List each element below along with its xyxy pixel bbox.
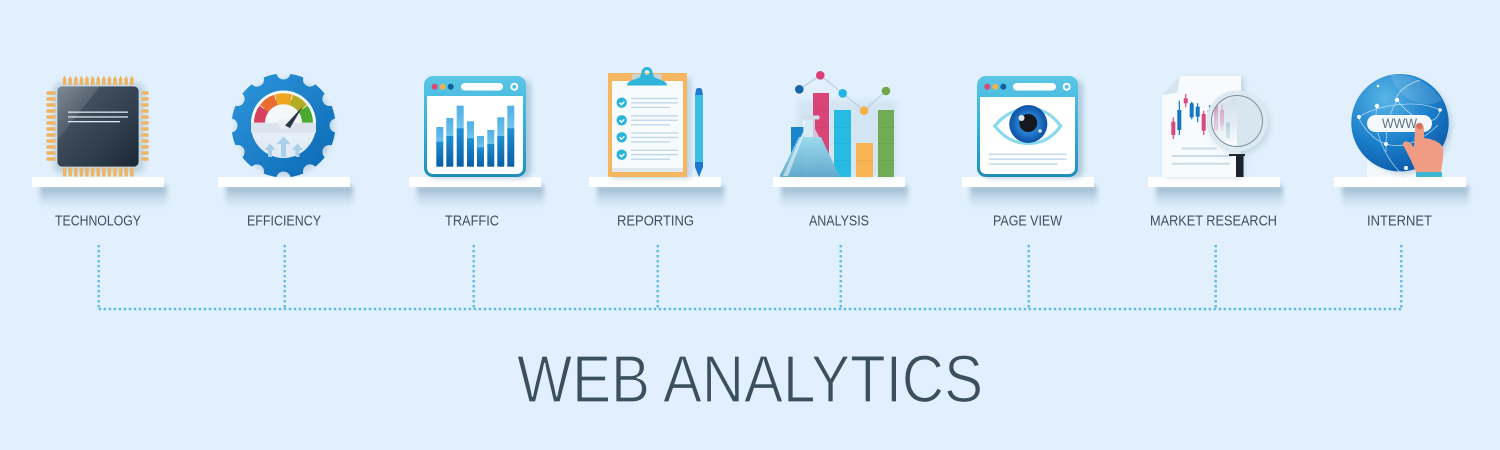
www text: WWW: [1382, 116, 1417, 131]
shelf: [773, 177, 908, 208]
infographic canvas: [32, 67, 1472, 402]
item: internet: [1334, 74, 1469, 230]
item: reporting: [589, 67, 724, 230]
icon: microchip: [51, 78, 148, 173]
item: technology: [32, 78, 167, 230]
item: analysis: [773, 71, 908, 230]
shelf: [218, 177, 353, 208]
title: WEB ANALYTICS: [517, 342, 983, 417]
item: efficiency: [218, 74, 353, 230]
label: TECHNOLOGY: [55, 214, 141, 230]
label: MARKET RESEARCH: [1150, 214, 1277, 230]
icon: browser window with bar chart: [424, 76, 531, 178]
icon: bar chart, line chart and flask: [780, 71, 897, 177]
label: EFFICIENCY: [247, 214, 321, 230]
shelf: [962, 177, 1097, 208]
connector: dotted bracket linking all icons: [99, 245, 1401, 309]
icon: globe with www and pointing hand: [1351, 74, 1451, 178]
item: market research: [1148, 76, 1283, 230]
label: INTERNET: [1367, 214, 1432, 230]
label: TRAFFIC: [445, 214, 499, 230]
label: PAGE VIEW: [993, 214, 1062, 230]
shelf: [409, 177, 544, 208]
shelf: [1148, 177, 1283, 208]
icon: browser window with eye: [977, 76, 1083, 178]
shelf: [589, 177, 724, 208]
icon: gear with speedometer: [232, 74, 336, 178]
label: REPORTING: [617, 214, 694, 230]
shelf: [1334, 177, 1469, 208]
icon: clipboard and pen: [608, 67, 703, 178]
item: traffic: [409, 76, 544, 230]
label: ANALYSIS: [809, 214, 869, 230]
shelf: [32, 177, 167, 208]
item: page view: [962, 76, 1097, 230]
icon: document with candlesticks and magnifier: [1162, 76, 1270, 177]
